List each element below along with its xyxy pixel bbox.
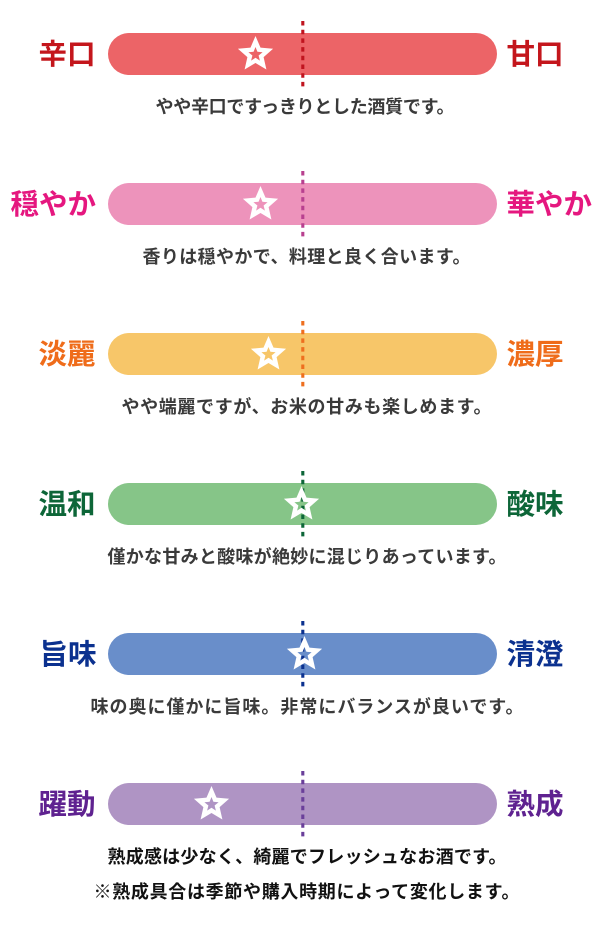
description: 香りは穏やかで、料理と良く合います。 [142, 247, 470, 267]
description: やや端麗ですが、お米の甘みも楽しめます。 [122, 396, 492, 417]
label: umami: 旨味 [40, 639, 97, 671]
center line [301, 171, 304, 237]
description: 味の奥に僅かに旨味。非常にバランスが良いです。 [90, 696, 524, 717]
slider bar [108, 633, 497, 675]
footnote: ※熟成具合は季節や購入時期によって変化します。 [94, 881, 520, 902]
label: floral: 華やか [506, 189, 592, 221]
label: mellow: 穏やか [10, 189, 96, 221]
icon: star marker [243, 186, 278, 220]
label: aged: 熟成 [506, 789, 564, 821]
center line [301, 21, 304, 87]
slider bar [108, 333, 497, 375]
panel: umami to clear [40, 621, 564, 717]
center line [301, 321, 304, 387]
panel: light to rich [38, 321, 564, 417]
label: mild: 温和 [38, 489, 96, 521]
slider bar [108, 783, 497, 825]
label: rich: 濃厚 [506, 339, 564, 371]
slider bar [108, 483, 497, 525]
slider bar [108, 183, 497, 225]
icon: star marker [284, 486, 319, 520]
label: acidic: 酸味 [506, 489, 564, 521]
panel: mild to acidic [38, 471, 564, 567]
description: 僅かな甘みと酸味が絶妙に混じりあっています。 [108, 546, 506, 567]
label: sweet: 甘口 [506, 39, 564, 71]
label: dry: 辛口 [38, 39, 96, 71]
slider bar [108, 33, 497, 75]
description: 熟成感は少なく、綺麗でフレッシュなお酒です。 [108, 846, 506, 867]
center line [301, 621, 304, 687]
icon: star marker [251, 336, 286, 370]
label: light: 淡麗 [38, 339, 96, 371]
label: lively: 躍動 [38, 789, 96, 821]
panel: lively to aged [38, 771, 564, 902]
icon: star marker [238, 36, 273, 70]
label: clear: 清澄 [506, 639, 564, 671]
panel: dry to sweet [38, 21, 564, 117]
center line [301, 771, 304, 837]
panel: mellow to floral [10, 171, 592, 267]
icon: star marker [287, 636, 322, 670]
center line [301, 471, 304, 537]
description: やや辛口ですっきりとした酒質です。 [156, 97, 454, 117]
icon: star marker [194, 786, 229, 820]
